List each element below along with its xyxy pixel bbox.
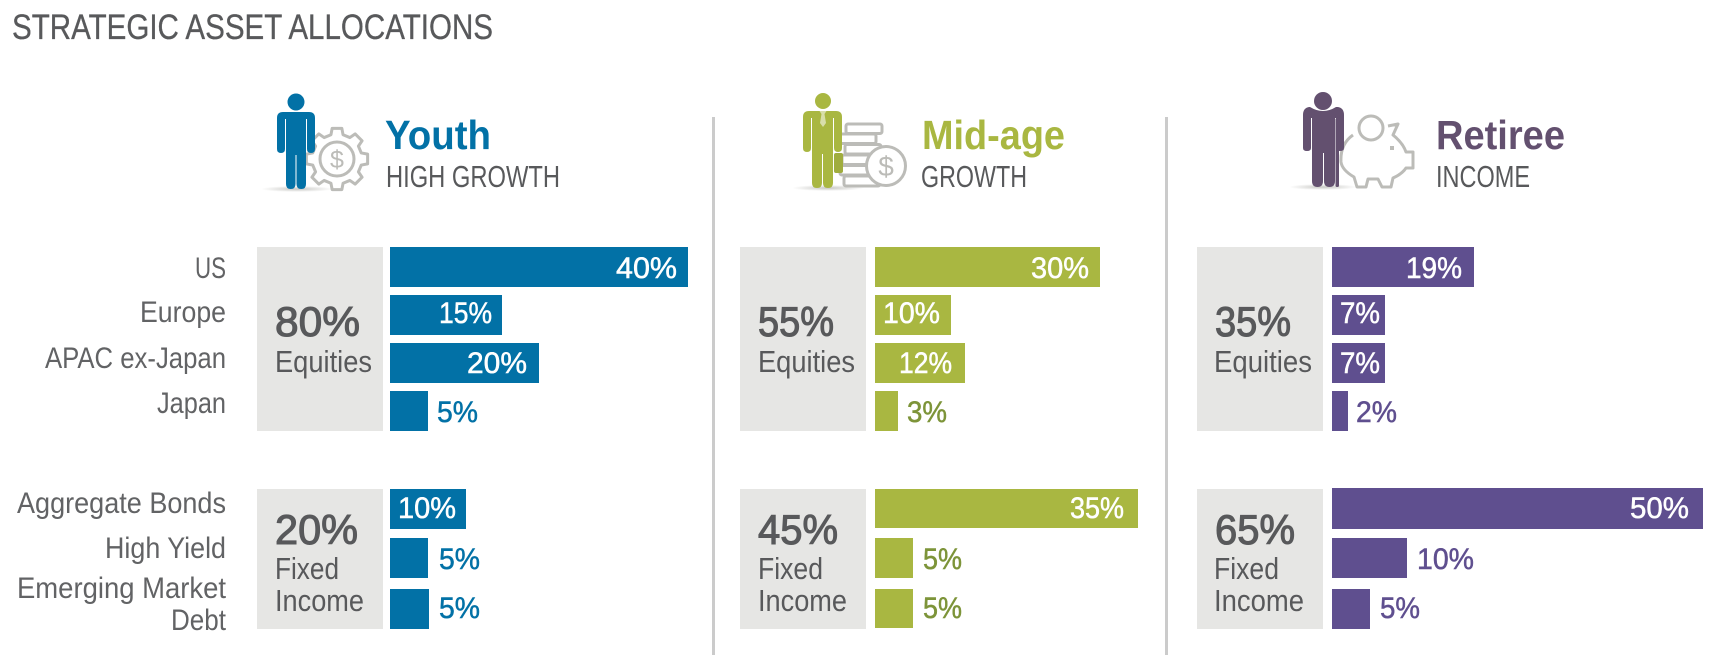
summary box: 65% fixed income: Income bbox=[1214, 583, 1304, 618]
bar: Japan 5% bbox=[390, 391, 478, 431]
heading: Mid-age: Mid-age bbox=[922, 112, 1065, 158]
icon: youth person with gear bbox=[261, 94, 368, 192]
bar: US 19% bbox=[1332, 247, 1474, 287]
label: US: US bbox=[195, 252, 226, 285]
bar: APAC ex-Japan 20%: 20% bbox=[467, 347, 527, 380]
summary box: 20% fixed income bbox=[257, 489, 383, 629]
bar: APAC ex-Japan 20% bbox=[390, 343, 539, 383]
summary box: 35% equities: Equities bbox=[1214, 344, 1312, 379]
bar: US 30%: 30% bbox=[1031, 252, 1089, 285]
subheading: HIGH GROWTH: HIGH GROWTH bbox=[386, 159, 560, 194]
title: STRATEGIC ASSET ALLOCATIONS bbox=[12, 8, 493, 47]
divider: mid-age / retiree bbox=[1165, 117, 1168, 655]
heading: Retiree: Retiree bbox=[1436, 112, 1565, 158]
row labels bbox=[17, 252, 227, 637]
icon: mid-age person with coins bbox=[792, 93, 906, 191]
panel: Retiree bbox=[1197, 92, 1703, 629]
summary box: 20% fixed income: 20% bbox=[275, 506, 358, 553]
summary box: 35% equities: 35% bbox=[1215, 298, 1291, 345]
panel: Youth bbox=[257, 94, 688, 629]
bar: APAC ex-Japan 12% bbox=[875, 343, 965, 383]
bar: Aggregate Bonds 50% bbox=[1332, 488, 1703, 529]
bar: APAC ex-Japan 7% bbox=[1332, 343, 1385, 383]
heading: Youth: Youth bbox=[385, 112, 491, 158]
subheading: GROWTH: GROWTH bbox=[921, 159, 1027, 194]
label: Emerging Market Debt: Debt bbox=[171, 604, 227, 637]
summary box: 45% fixed income: 45% bbox=[758, 506, 838, 553]
bar: Emerging Market Debt 5%: 5% bbox=[1380, 592, 1420, 625]
bar: Emerging Market Debt 5%: 5% bbox=[439, 592, 480, 625]
bar: Europe 7% bbox=[1332, 295, 1385, 335]
summary box: 65% fixed income bbox=[1197, 489, 1323, 629]
summary box: 35% equities bbox=[1197, 247, 1323, 431]
summary box: 45% fixed income bbox=[740, 489, 866, 629]
bar: Europe 10%: 10% bbox=[883, 297, 940, 330]
bar: US 40% bbox=[390, 247, 688, 287]
bar: US 40%: 40% bbox=[616, 252, 677, 285]
summary box: 20% fixed income: Income bbox=[275, 583, 364, 618]
summary box: 45% fixed income: Income bbox=[758, 583, 847, 618]
icon: mid-age person with coins: $ bbox=[878, 151, 894, 182]
bar: Emerging Market Debt 5%: 5% bbox=[923, 592, 962, 625]
bar: High Yield 5% bbox=[875, 538, 962, 578]
bar: US 19%: 19% bbox=[1406, 252, 1462, 285]
summary box: 55% equities: 55% bbox=[758, 298, 834, 345]
summary box: 65% fixed income: Fixed bbox=[1214, 551, 1279, 586]
bar: Japan 3%: 3% bbox=[907, 396, 947, 429]
summary box: 20% fixed income: Fixed bbox=[275, 551, 339, 586]
bar: Europe 15%: 15% bbox=[439, 297, 492, 330]
bar: High Yield 5%: 5% bbox=[439, 543, 480, 576]
bar: Japan 3% bbox=[875, 391, 947, 431]
label: Europe: Europe bbox=[140, 296, 226, 329]
bar: APAC ex-Japan 7%: 7% bbox=[1340, 347, 1380, 380]
divider: youth / mid-age bbox=[712, 117, 715, 655]
bar: Japan 5%: 5% bbox=[437, 396, 478, 429]
bar: Aggregate Bonds 10%: 10% bbox=[398, 492, 456, 525]
bar: High Yield 10% bbox=[1332, 538, 1474, 578]
summary box: 55% equities bbox=[740, 247, 866, 431]
summary box: 65% fixed income: 65% bbox=[1215, 506, 1295, 553]
label: High Yield: High Yield bbox=[105, 532, 226, 565]
bar: US 30% bbox=[875, 247, 1100, 287]
bar: High Yield 5% bbox=[390, 538, 480, 578]
bar: Aggregate Bonds 35% bbox=[875, 489, 1138, 528]
label: Aggregate Bonds: Aggregate Bonds bbox=[17, 487, 226, 520]
label: Emerging Market Debt bbox=[17, 572, 227, 637]
bar: Europe 7%: 7% bbox=[1340, 297, 1380, 330]
bar: Emerging Market Debt 5% bbox=[390, 589, 480, 629]
label: Japan: Japan bbox=[157, 387, 226, 420]
summary box: 45% fixed income: Fixed bbox=[758, 551, 823, 586]
label: APAC ex-Japan: APAC ex-Japan bbox=[45, 342, 226, 375]
bar: Emerging Market Debt 5% bbox=[1332, 589, 1420, 629]
panel: Mid-age bbox=[740, 93, 1138, 629]
bar: High Yield 10%: 10% bbox=[1417, 543, 1474, 576]
subheading: INCOME: INCOME bbox=[1436, 159, 1530, 194]
bar: Aggregate Bonds 50%: 50% bbox=[1630, 492, 1689, 525]
summary box: 80% equities: 80% bbox=[275, 298, 360, 345]
bar: Europe 15% bbox=[390, 295, 502, 335]
bar: Aggregate Bonds 10% bbox=[390, 489, 466, 529]
bar: Japan 2% bbox=[1332, 391, 1397, 431]
bar: High Yield 5%: 5% bbox=[923, 543, 962, 576]
bar: APAC ex-Japan 12%: 12% bbox=[899, 347, 952, 380]
label: Emerging Market Debt: Emerging Market bbox=[17, 572, 227, 605]
summary box: 80% equities bbox=[257, 247, 383, 431]
bar: Aggregate Bonds 35%: 35% bbox=[1070, 492, 1124, 525]
bar: Emerging Market Debt 5% bbox=[875, 589, 962, 628]
icon: retiree person with piggy bank bbox=[1289, 92, 1413, 190]
bar: Europe 10% bbox=[875, 295, 951, 335]
bar: Japan 2%: 2% bbox=[1356, 396, 1397, 429]
summary box: 80% equities: Equities bbox=[275, 344, 372, 379]
summary box: 55% equities: Equities bbox=[758, 344, 855, 379]
icon: youth person with gear: $ bbox=[330, 146, 344, 174]
